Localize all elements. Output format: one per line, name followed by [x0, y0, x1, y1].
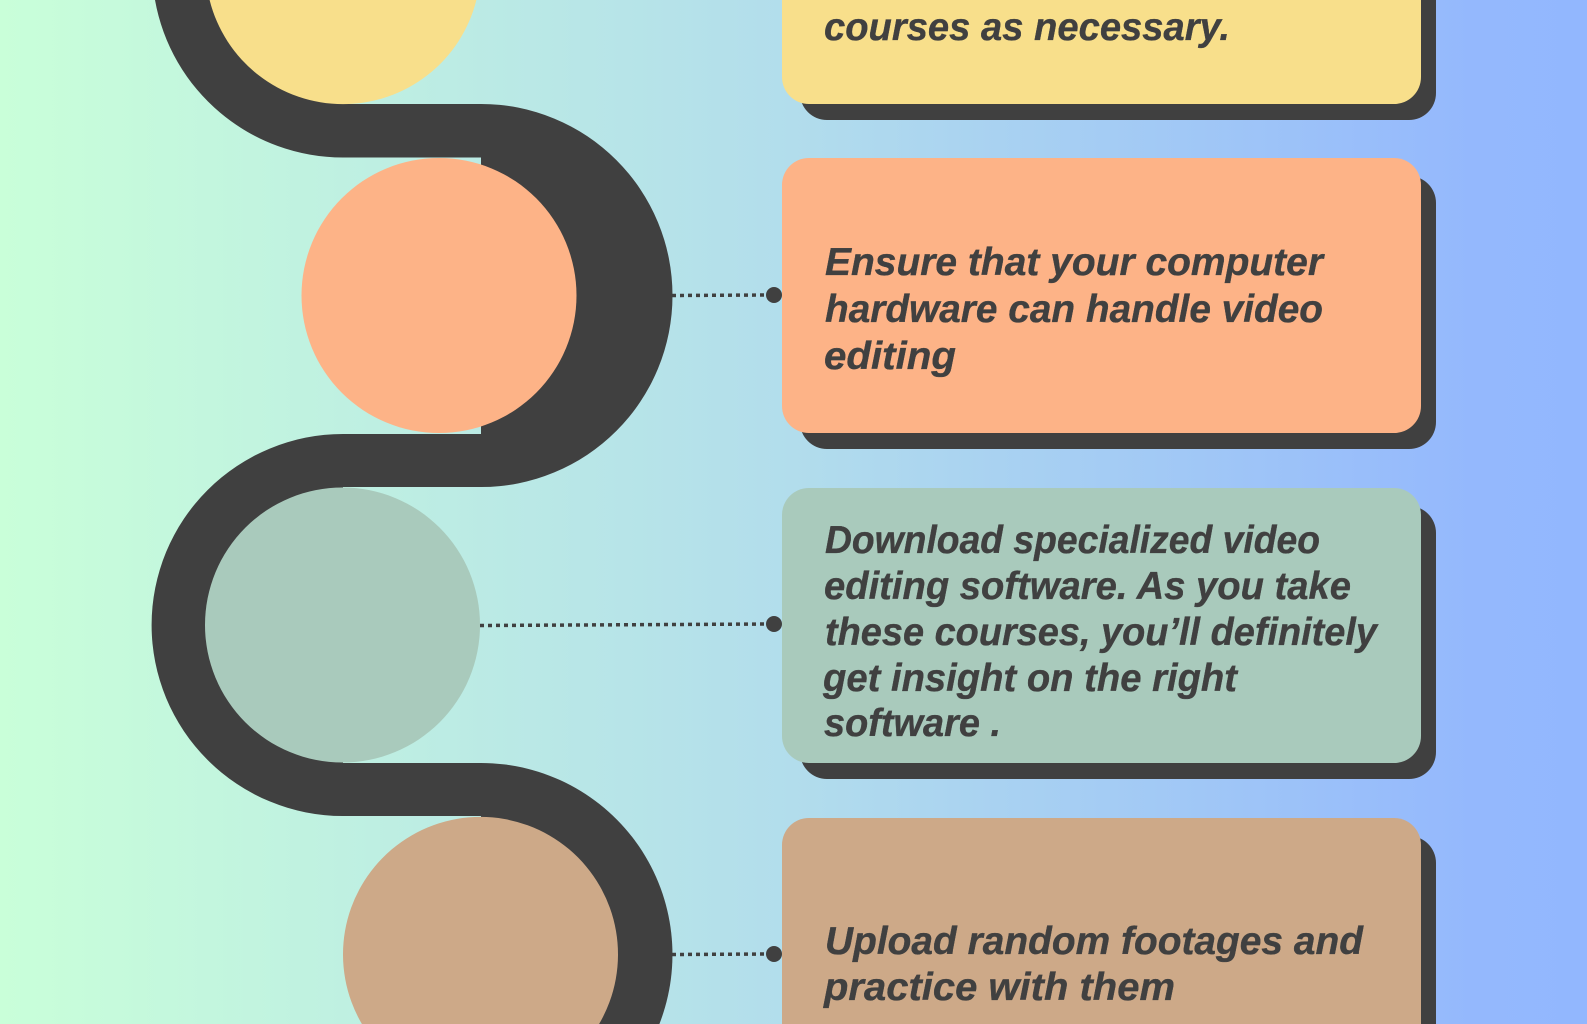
text: step 4: practice with them — [823, 966, 1175, 1009]
panel: step 2 card — [782, 158, 1436, 449]
text: step 3: get insight on the right — [822, 657, 1239, 700]
connector: step 4 — [672, 946, 782, 962]
panel: step 4 card — [782, 818, 1436, 1024]
panel: step 3 card — [782, 488, 1436, 779]
text: step 4 — [823, 920, 1364, 1009]
text: step 3 — [822, 519, 1379, 745]
text: step 3: editing software. As you take — [824, 565, 1351, 608]
text: step 3: software . — [824, 702, 1001, 745]
text: step 3: these courses, you’ll definitely — [825, 611, 1379, 654]
text: step 4: Upload random footages and — [825, 920, 1364, 963]
text: step 2: Ensure that your computer — [825, 241, 1325, 284]
text: step 2: hardware can handle video — [825, 288, 1323, 331]
circle: step 2 orange — [302, 158, 576, 433]
text: step 3: Download specialized video — [825, 519, 1320, 562]
text: step 1: courses as necessary. — [824, 6, 1230, 49]
serpentine path — [152, 0, 673, 1024]
text: step 2 — [824, 241, 1325, 378]
circle: step 3 green — [205, 488, 480, 762]
connector: step 2 — [672, 287, 782, 303]
connector: step 3 — [480, 616, 782, 632]
panel: step 1 card — [782, 0, 1436, 120]
text: step 2: editing — [824, 335, 956, 378]
circle: step 4 tan — [343, 817, 618, 1024]
circle: step 1 yellow — [210, 0, 476, 104]
